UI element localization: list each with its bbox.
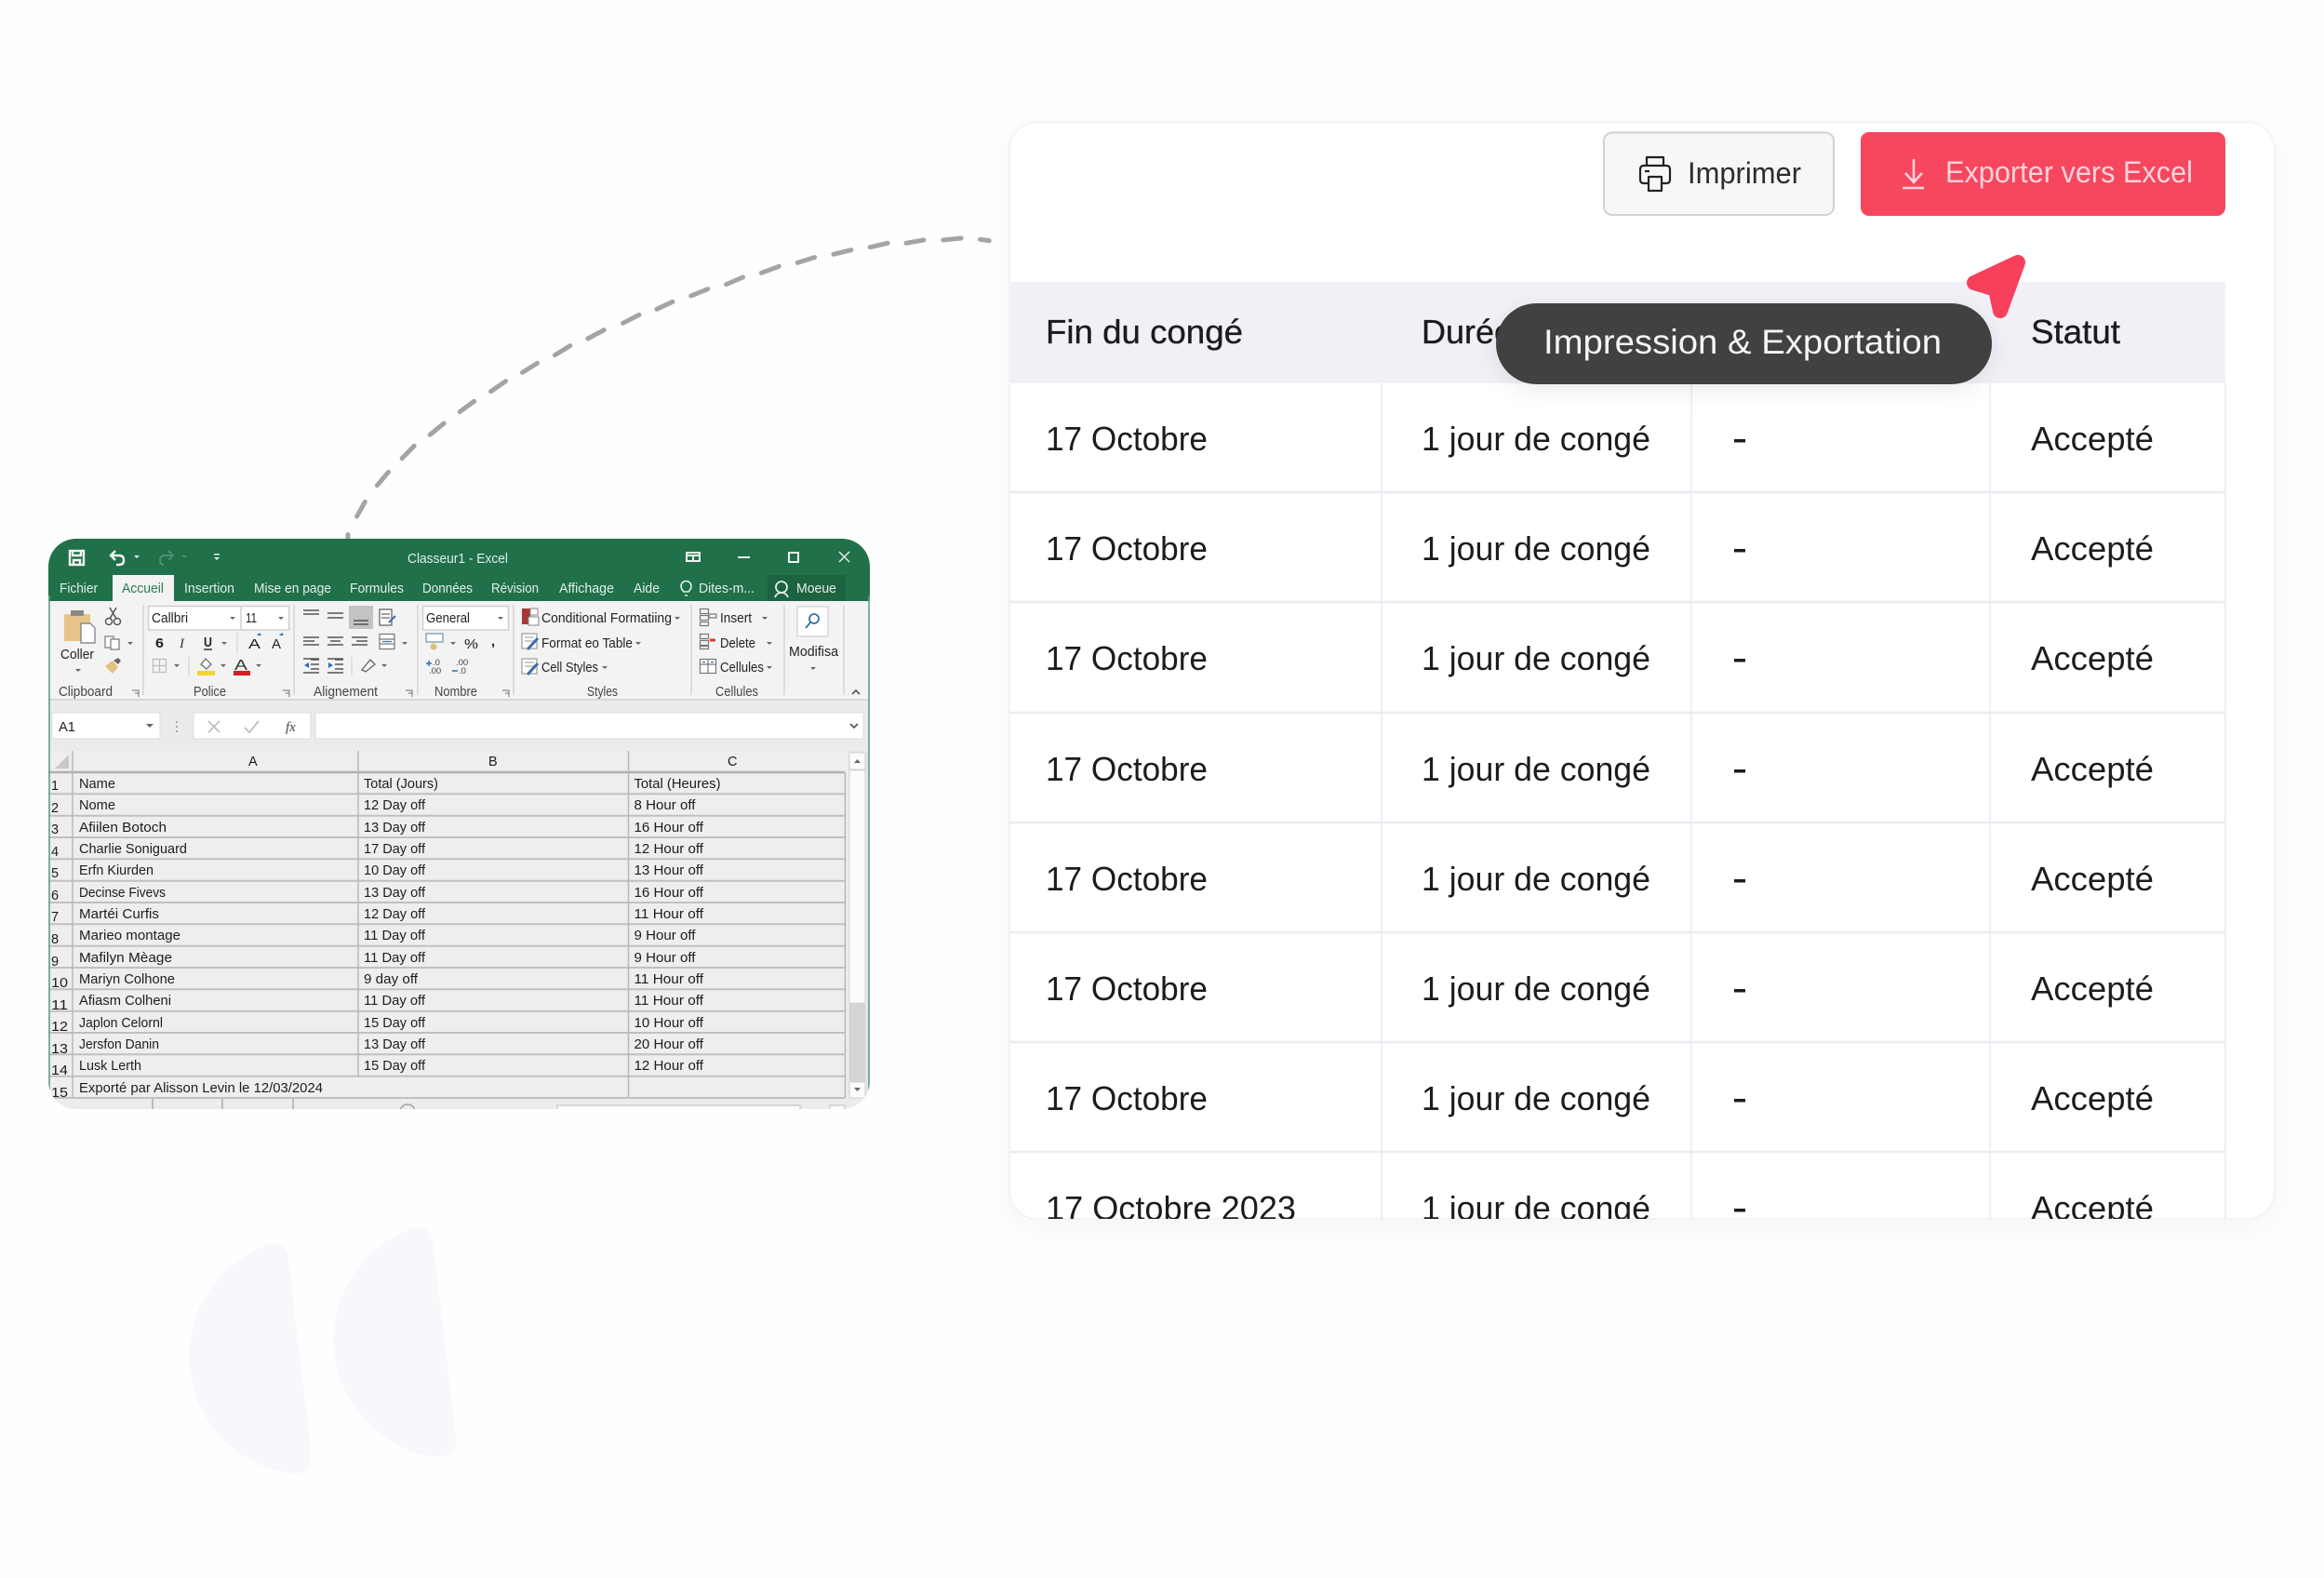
column B days: 11 Day off [364, 994, 426, 1009]
column A names: Decinse Fivevs [79, 886, 166, 901]
group: number: General [426, 611, 470, 626]
panel: leave table card [1009, 122, 2275, 1227]
icon: ribbon display [687, 553, 700, 561]
row numbers: 1 [51, 779, 59, 794]
icon: merge [380, 635, 394, 649]
group: styles: Conditional Formatiing [541, 611, 672, 626]
group: editing [789, 607, 860, 694]
column A names: Martéi Curfis [79, 907, 159, 922]
column B days: 13 Day off [364, 1037, 426, 1052]
formula bar [48, 701, 870, 751]
icon: minimize [738, 556, 750, 558]
icon: copy [105, 636, 119, 649]
group: styles [522, 608, 680, 700]
group: clipboard [59, 608, 139, 700]
ribbon tabs: Mise en page [254, 581, 331, 596]
button: Imprimer: Imprimer [1688, 156, 1801, 190]
ribbon tabs: Fichier [60, 581, 98, 596]
table header band: Durée [1422, 313, 1513, 351]
column A names: Erfn Kiurden [79, 863, 154, 878]
ribbon tabs: Accueil [122, 581, 164, 596]
ribbon tabs: Insertion [184, 581, 234, 596]
table row 2 [1046, 529, 2154, 568]
row numbers: 8 [51, 932, 59, 947]
icon: font colour [234, 660, 250, 675]
table row 3: 1 jour de congé [1422, 639, 1650, 677]
group: clipboard: Coller [60, 648, 94, 662]
group: editing: Modifisa [789, 645, 839, 660]
group: alignment: Alignement [314, 685, 378, 700]
group: cells: Delete [720, 636, 755, 651]
table row 6: 17 Octobre [1046, 970, 1208, 1008]
column A names: Jersfon Danin [79, 1037, 159, 1052]
group: font: Callbri [152, 611, 188, 626]
column C hours [634, 777, 720, 1074]
row numbers: 14 [51, 1063, 68, 1078]
column B days: 13 Day off [364, 821, 426, 836]
column C hours: 9 Hour off [634, 951, 696, 966]
tooltip: Impression & Exportation [1496, 303, 1992, 384]
title bar [48, 539, 870, 601]
icon: close [839, 552, 849, 562]
table row 6 [1046, 970, 2154, 1008]
ribbon body [48, 601, 870, 700]
table row 5: 17 Octobre [1046, 860, 1208, 898]
column C hours: 11 Hour off [634, 994, 704, 1009]
panel: Excel window [48, 539, 870, 1119]
group: font: I [179, 636, 185, 651]
group: styles: Styles [587, 685, 618, 700]
table header band: Fin du congé [1046, 313, 1243, 351]
icon: printer [1640, 157, 1670, 191]
row numbers: 13 [51, 1042, 68, 1057]
table row 5: 1 jour de congé [1422, 860, 1650, 898]
column B days: 13 Day off [364, 886, 426, 901]
column C hours: 8 Hour off [634, 798, 696, 813]
ribbon tabs: Aide [634, 581, 660, 596]
table row 7: Accepté [2031, 1079, 2154, 1117]
button: Exporter vers Excel: Exporter vers Excel [1945, 155, 2193, 189]
icon: undo [111, 551, 124, 565]
group: alignment [303, 606, 412, 700]
ribbon tabs: Données [422, 581, 473, 596]
group: clipboard: Clipboard [59, 685, 113, 700]
window title: Classeur1 - Excel [407, 551, 508, 567]
icon: person [775, 582, 788, 597]
icon: red cursor arrow [1974, 262, 2018, 311]
column A names: Japlon Celornl [79, 1016, 163, 1031]
table row 1: 1 jour de congé [1422, 420, 1650, 458]
icon: orientation [362, 660, 375, 672]
table row 5: Accepté [2031, 860, 2154, 898]
column B days: 10 Day off [364, 863, 426, 878]
column A names: Afiasm Colheni [79, 994, 171, 1009]
group: cells: Cellules [715, 685, 758, 700]
column C hours: 12 Hour off [634, 1059, 704, 1074]
row numbers: 6 [51, 889, 59, 903]
icon: decimals: .0 [433, 658, 440, 668]
icon: indent [303, 659, 343, 673]
table row 4 [1046, 750, 2154, 788]
row numbers: 15 [51, 1086, 68, 1101]
column C hours: 12 Hour off [634, 842, 704, 857]
row numbers: 2 [51, 801, 59, 816]
row numbers: 10 [51, 976, 68, 991]
column A names: Mariyn Colhone [79, 972, 175, 987]
column A names: Lusk Lerth [79, 1059, 141, 1074]
group: number: Nombre [434, 685, 477, 700]
group: font [149, 607, 289, 700]
icon: font colour: A [234, 658, 247, 674]
icon: lightbulb [681, 581, 691, 595]
table row 2: 17 Octobre [1046, 529, 1208, 568]
column A names: Nome [79, 798, 115, 813]
table row 1: 17 Octobre [1046, 420, 1208, 458]
table header band [1009, 282, 2225, 383]
row numbers: 7 [51, 910, 59, 925]
column A names: Charlie Soniguard [79, 842, 187, 857]
group: font: Police [194, 685, 226, 700]
group: number: , [491, 635, 495, 649]
ribbon tabs: Dites-m... [699, 581, 755, 596]
ribbon tabs: Affichage [559, 581, 614, 596]
icon: save [70, 551, 84, 565]
ribbon tabs: Moeue [796, 581, 836, 596]
bottom status strip [48, 1099, 870, 1119]
decorative quote mark shapes [189, 1227, 456, 1474]
icon: cell styles [522, 659, 538, 675]
column B days: 15 Day off [364, 1059, 426, 1074]
column C hours: 9 Hour off [634, 929, 696, 943]
spreadsheet grid [48, 751, 848, 1101]
icon: paste [64, 610, 95, 643]
table row 1 [1046, 420, 2154, 458]
row numbers: 11 [51, 998, 68, 1013]
group: font: 11 [246, 611, 257, 626]
column C hours: Total (Heures) [634, 777, 720, 792]
column C hours: 11 Hour off [634, 907, 704, 922]
table header band: Statut [2031, 313, 2120, 351]
button: Exporter vers Excel [1861, 132, 2225, 216]
row numbers: 5 [51, 866, 59, 881]
icon: fill colour [197, 659, 215, 675]
icon: decimals: .0 [459, 666, 466, 676]
column B days: 17 Day off [364, 842, 426, 857]
column C hours: 13 Hour off [634, 863, 704, 878]
column A names: Mafilyn Mèage [79, 951, 172, 966]
icon: maximize [789, 553, 798, 562]
spreadsheet grid: A [248, 755, 258, 769]
column C hours: 20 Hour off [634, 1037, 704, 1052]
spreadsheet grid: C [728, 755, 737, 769]
spreadsheet grid: B [488, 755, 498, 769]
column A names: Exporté par Alisson Levin le 12/03/2024 [79, 1081, 323, 1096]
group: styles: Format eo Table [541, 636, 633, 651]
row numbers: 9 [51, 955, 59, 970]
table row 8 clipped: 17 Octobre 2023 [1046, 1189, 1296, 1227]
icon: decimals: .00 [456, 658, 468, 668]
column A names: Afiilen Botoch [79, 821, 167, 836]
icon: borders [153, 659, 167, 673]
table row 2: 1 jour de congé [1422, 529, 1650, 568]
row numbers: 12 [51, 1020, 68, 1035]
group: cells [700, 608, 772, 700]
table row 5 [1046, 860, 2154, 898]
formula bar: fx [286, 720, 296, 735]
group: font: A [272, 637, 281, 652]
row numbers [51, 779, 68, 1101]
icon: conditional formatting [522, 608, 539, 625]
row numbers: 4 [51, 845, 59, 860]
icon: insert [700, 608, 716, 625]
column B days [364, 777, 438, 1074]
icon: wrap text [380, 609, 395, 625]
table row 3: Accepté [2031, 639, 2154, 677]
column A names: Name [79, 777, 115, 792]
ribbon tabs [60, 575, 846, 603]
column C hours: 16 Hour off [634, 886, 704, 901]
icon: decimals: .00 [429, 666, 441, 676]
button: Imprimer [1604, 132, 1834, 215]
column B days: 11 Day off [364, 929, 426, 943]
table row 2: Accepté [2031, 529, 2154, 568]
column B days: 9 day off [364, 972, 419, 987]
table row 8 clipped [1046, 1189, 2154, 1227]
icon: download [1903, 159, 1924, 188]
table row 6: Accepté [2031, 970, 2154, 1008]
table row 4: 17 Octobre [1046, 750, 1208, 788]
ribbon tabs: Révision [491, 581, 539, 596]
column B days: 12 Day off [364, 798, 426, 813]
icon: decimals [426, 659, 468, 674]
ribbon tabs: Formules [350, 581, 404, 596]
group: styles: Cell Styles [541, 661, 598, 675]
column C hours: 16 Hour off [634, 821, 704, 836]
column B days: 15 Day off [364, 1016, 426, 1031]
group: font: U [204, 635, 212, 650]
table row 4: 1 jour de congé [1422, 750, 1650, 788]
group: font: A [248, 637, 260, 652]
table row 3 [1046, 639, 2154, 677]
column A names: Marieo montage [79, 929, 180, 943]
column B days: 12 Day off [364, 907, 426, 922]
table row 7: 17 Octobre [1046, 1079, 1208, 1117]
table row 8 clipped: Accepté [2031, 1189, 2154, 1227]
row numbers: 3 [51, 822, 59, 837]
table row 3: 17 Octobre [1046, 639, 1208, 677]
table row 6: 1 jour de congé [1422, 970, 1650, 1008]
icon: format cells [700, 659, 716, 674]
formula bar: A1 [59, 720, 75, 735]
icon: format painter [105, 658, 121, 674]
table row 7: 1 jour de congé [1422, 1079, 1650, 1117]
table row 7 [1046, 1079, 2154, 1117]
group: number: % [464, 637, 478, 652]
dashed connector curve [348, 238, 989, 539]
group: cells: Insert [720, 611, 752, 626]
table row 1: Accepté [2031, 420, 2154, 458]
tooltip: Impression & Exportation: Impression & Exportation [1543, 323, 1942, 361]
column C hours: 11 Hour off [634, 972, 704, 987]
column A names [79, 777, 323, 1096]
vertical scrollbar [848, 751, 870, 1098]
table row 8 clipped: 1 jour de congé [1422, 1189, 1650, 1227]
column B days: Total (Jours) [364, 777, 438, 792]
icon: delete [700, 635, 715, 649]
column C hours: 10 Hour off [634, 1016, 704, 1031]
icon: accounting [426, 634, 443, 649]
group: cells: Cellules [720, 661, 764, 675]
column B days: 11 Day off [364, 951, 426, 966]
group: font: 6 [155, 636, 164, 651]
table row 4: Accepté [2031, 750, 2154, 788]
icon: format as table [522, 634, 538, 649]
group: number [422, 607, 509, 700]
icon: magnifier [806, 614, 819, 628]
icon: redo [160, 551, 173, 565]
icon: scissors [106, 608, 121, 625]
